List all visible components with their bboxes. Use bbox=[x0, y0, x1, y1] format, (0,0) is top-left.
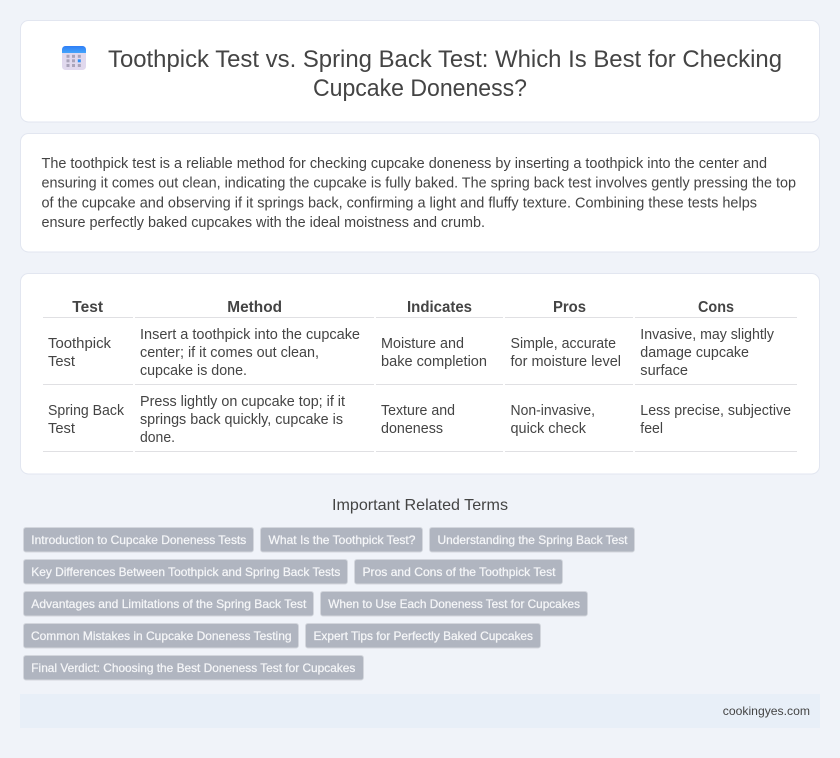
table row: spring back test bbox=[48, 394, 791, 446]
table row: toothpick test: Simple, accurate bbox=[510, 336, 616, 352]
table row: toothpick test: Invasive, may slightly bbox=[640, 327, 775, 343]
table row: spring back test: Non-invasive, bbox=[510, 403, 595, 419]
tag: Expert Tips for Perfectly Baked Cupcakes bbox=[314, 629, 533, 643]
table row: toothpick test: damage cupcake bbox=[640, 345, 749, 361]
tag bbox=[430, 528, 634, 552]
table header row bbox=[72, 299, 734, 316]
table row: spring back test: doneness bbox=[381, 421, 443, 437]
text block: summary paragraph: ensure perfectly baked cupcakes with the ideal moistness and crumb. bbox=[42, 215, 485, 231]
table header row: Cons bbox=[698, 299, 734, 316]
tag bbox=[306, 624, 540, 648]
table row: spring back test: Less precise, subjective bbox=[640, 403, 791, 419]
tag: Advantages and Limitations of the Spring Back Test bbox=[31, 597, 307, 611]
title: Toothpick Test vs. Spring Back Test: Which Is Best for Checking bbox=[108, 46, 782, 73]
title bbox=[108, 46, 782, 102]
tag bbox=[24, 560, 348, 584]
table row: spring back test: Press lightly on cupcake top; if it bbox=[140, 394, 345, 410]
tag bbox=[24, 592, 314, 616]
tag bbox=[320, 592, 588, 616]
tag: Understanding the Spring Back Test bbox=[438, 533, 628, 547]
table row: spring back test: Test bbox=[48, 421, 75, 437]
panel: related term tags bbox=[24, 528, 634, 680]
table header row: Test bbox=[72, 299, 104, 316]
table row: toothpick test: Test bbox=[48, 354, 75, 370]
text block: summary paragraph: ensuring it comes out clean, indicating the cupcake is fully baked. The spring back test involves gently pressing the top bbox=[42, 176, 796, 192]
table row: spring back test: Spring Back bbox=[48, 403, 125, 419]
footer bbox=[20, 694, 820, 728]
table row: spring back test: springs back quickly, cupcake is bbox=[140, 412, 343, 428]
title: Cupcake Doneness? bbox=[313, 75, 527, 102]
panel: header bbox=[20, 20, 820, 122]
tag: Common Mistakes in Cupcake Doneness Testing bbox=[31, 629, 292, 643]
table row: spring back test: done. bbox=[140, 430, 175, 446]
table row: toothpick test: center; if it comes out clean, bbox=[140, 345, 319, 361]
tag bbox=[24, 656, 364, 680]
table header row: Method bbox=[227, 299, 282, 316]
table row: spring back test: quick check bbox=[510, 421, 587, 437]
text block: summary paragraph: The toothpick test is a reliable method for checking cupcake doneness by inserting a toothpick into the center and bbox=[42, 156, 767, 172]
tag bbox=[260, 528, 422, 552]
table row: toothpick test bbox=[48, 327, 775, 379]
heading: related terms: Important Related Terms bbox=[332, 497, 508, 514]
table header row: Pros bbox=[553, 299, 586, 316]
table row: spring back test: Texture and bbox=[381, 403, 455, 419]
table row: toothpick test: Toothpick bbox=[48, 336, 112, 352]
tag: Pros and Cons of the Toothpick Test bbox=[362, 565, 556, 579]
tag bbox=[24, 528, 254, 552]
tag: What Is the Toothpick Test? bbox=[268, 533, 416, 547]
panel: comparison table bbox=[20, 274, 820, 474]
tag: Final Verdict: Choosing the Best Doneness Test for Cupcakes bbox=[31, 661, 355, 675]
table row: toothpick test: Insert a toothpick into the cupcake bbox=[140, 327, 360, 343]
footer: cookingyes.com bbox=[723, 704, 810, 718]
table row: toothpick test: for moisture level bbox=[510, 354, 621, 370]
table row: toothpick test: cupcake is done. bbox=[140, 363, 247, 379]
table header row: Indicates bbox=[407, 299, 472, 316]
table row: toothpick test: bake completion bbox=[381, 354, 487, 370]
table row: toothpick test: Moisture and bbox=[381, 336, 464, 352]
tag: Introduction to Cupcake Doneness Tests bbox=[31, 533, 246, 547]
table row: toothpick test: surface bbox=[640, 363, 688, 379]
tag: When to Use Each Doneness Test for Cupcakes bbox=[328, 597, 580, 611]
panel: introduction bbox=[20, 134, 820, 252]
text block: summary paragraph bbox=[42, 156, 796, 231]
tag bbox=[24, 624, 298, 648]
tag: Key Differences Between Toothpick and Spring Back Tests bbox=[31, 565, 340, 579]
table row: spring back test: feel bbox=[640, 421, 663, 437]
text block: summary paragraph: of the cupcake and observing if it springs back, confirming a light and fluffy texture. Combining these tests helps bbox=[42, 195, 757, 211]
icon: calendar bbox=[62, 46, 86, 70]
tag bbox=[354, 560, 562, 584]
